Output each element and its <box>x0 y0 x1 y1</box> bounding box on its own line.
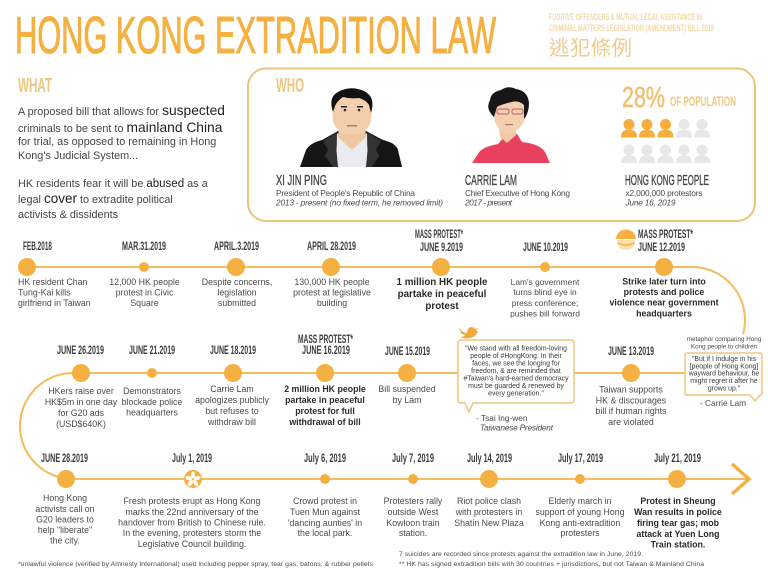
text: Hong Kong people details: x2,000,000 protestors <box>626 188 702 198</box>
event: Mar 31 2019: Square <box>130 298 159 308</box>
event: July 6 2019: Crowd protest in <box>293 496 357 506</box>
event: June 28 2019: JUNE 28.2019 <box>41 451 88 465</box>
event: Mar 31 2019 <box>109 239 180 308</box>
callout: Carrie Lam quote <box>680 334 765 408</box>
event: June 16 2019: protest for full <box>295 406 355 416</box>
event: June 15 2019: JUNE 15.2019 <box>385 344 430 358</box>
event: June 13 2019: HK & discourages <box>596 396 667 406</box>
event: July 1 2019: Fresh protests erupt as Hong Kong <box>124 496 261 506</box>
event: June 12 2019: Strike later turn into <box>622 276 706 286</box>
event: June 12 2019: MASS PROTEST* <box>638 227 693 241</box>
event: June 18 2019: Carrie Lam <box>210 384 254 394</box>
event: April 3 2019: APRIL.3.2019 <box>214 239 259 253</box>
text: Tsai Ing-wen attribution: - Tsai Ing-wen <box>476 413 528 423</box>
callout: Tsai Ing-wen quote: must be guarded & renewed by <box>468 383 564 390</box>
event: June 28 2019: help "liberate" <box>38 525 92 535</box>
callout: Carrie Lam quote: wayward behaviour, he <box>688 370 759 378</box>
text: Xi Jin Ping details: President of People's Republic of China <box>276 188 415 198</box>
event: July 6 2019: Tuen Mun against <box>290 507 361 517</box>
text block: what description <box>18 103 225 221</box>
event: April 28 2019: protest at legislative <box>293 288 371 298</box>
event: Feb 2018: FEB.2018 <box>23 239 52 253</box>
event: April 28 2019: 130,000 HK people <box>294 277 370 287</box>
event: July 7 2019: station. <box>399 528 427 538</box>
event: June 28 2019: activists call on <box>35 504 95 514</box>
callout: Tsai Ing-wen quote: freedom, & are reminded that <box>471 368 561 375</box>
callout: Tsai Ing-wen quote: "We stand with all freedom-loving <box>465 346 567 352</box>
event: June 13 2019 <box>596 344 667 427</box>
panel: who <box>248 68 755 221</box>
event: July 1 2019: July 1, 2019 <box>172 451 212 465</box>
timeline path <box>20 267 748 479</box>
text: Carrie Lam details: CARRIE LAM <box>465 173 517 189</box>
icon: helmet protester <box>616 230 636 250</box>
event: July 7 2019 <box>384 451 443 538</box>
text: Xi Jin Ping details: XI JIN PING <box>276 173 327 189</box>
panel: what <box>18 75 225 221</box>
event: Mar 31 2019: 12,000 HK people <box>109 277 180 287</box>
event: July 21 2019: firing tear gas; mob <box>637 518 720 528</box>
footnote: suicides and extradition bills: ** HK has signed extradition bills with 30 countries + jurisdictions, but not Taiwan & Mainland China <box>399 561 704 568</box>
subtitle: bill name <box>549 12 714 34</box>
event: July 7 2019: Protesters rally <box>384 496 443 506</box>
event: April 28 2019 <box>293 239 371 308</box>
text: Hong Kong people details: June 16, 2019 <box>624 198 676 208</box>
event: Feb 2018 <box>18 239 91 308</box>
event: July 1 2019: Legislative Council building. <box>138 539 246 549</box>
icon: bauhinia flower <box>185 472 201 487</box>
event: June 15 2019 <box>378 344 436 405</box>
event: July 7 2019: July 7, 2019 <box>392 451 434 465</box>
event: June 21 2019: blockade police <box>122 397 182 407</box>
event: April 28 2019: building <box>317 298 347 308</box>
event: July 14 2019: Riot police clash <box>457 496 521 506</box>
pictogram: people <box>621 119 710 163</box>
event: June 10 2019 <box>510 240 580 318</box>
event: June 28 2019: Hong Kong <box>43 493 87 503</box>
text: Tsai Ing-wen attribution <box>476 413 554 432</box>
event: June 10 2019: turns blind eye in <box>513 287 577 297</box>
event: June 21 2019: Demonstrators <box>123 386 181 396</box>
event: July 17 2019 <box>535 451 625 538</box>
footnote: suicides and extradition bills: 7 suicides are recorded since protests against the extradition law in June, 2019. <box>399 551 643 558</box>
event: July 6 2019: 'dancing aunties' in <box>288 518 362 528</box>
footnote: unlawful violence: *unlawful violence (verified by Amnesty International) used including pepper spray, tear gas, batons, & rubber pellets <box>18 561 374 568</box>
event: July 14 2019: Shatin New Plaza <box>454 518 524 528</box>
event: June 10 2019: JUNE 10.2019 <box>523 240 568 254</box>
event: July 21 2019: Wan results in police <box>634 507 722 517</box>
event: July 17 2019: Kong anti-extradition <box>540 518 620 528</box>
event: June 28 2019: the city. <box>50 536 80 546</box>
event: June 9 2019: MASS PROTEST* <box>415 227 463 241</box>
footnote: suicides and extradition bills <box>399 551 704 568</box>
text block: what description: criminals to be sent to mainland China <box>18 120 223 135</box>
event: June 9 2019: JUNE 9.2019 <box>420 240 463 254</box>
event: June 26 2019: HKers raise over <box>48 386 114 396</box>
event: June 12 2019: JUNE 12.2019 <box>638 240 685 254</box>
callout: Tsai Ing-wen quote: faces, we see the longing for <box>472 360 561 368</box>
event: July 6 2019 <box>288 451 362 538</box>
event: June 18 2019: JUNE 18.2019 <box>210 343 256 357</box>
event: June 12 2019: violence near government <box>609 298 719 308</box>
event: April 3 2019 <box>202 239 272 308</box>
portrait: Carrie Lam <box>472 87 550 163</box>
heading: what: WHAT <box>18 75 52 97</box>
event: June 21 2019 <box>122 343 182 418</box>
event: July 17 2019: protesters <box>560 528 600 538</box>
event: June 12 2019: protests and police <box>624 287 704 297</box>
callout: Carrie Lam quote: "But if I indulge in his <box>692 356 757 363</box>
text block: what description: Kong's Judicial System... <box>18 150 138 162</box>
event: June 12 2019 <box>609 227 719 318</box>
event: June 16 2019: partake in peaceful <box>285 395 365 405</box>
event: June 26 2019: (USD$640K) <box>56 419 106 429</box>
callout: Carrie Lam quote: grows up." <box>708 386 741 392</box>
text: Carrie Lam details: Chief Executive of Hong Kong <box>465 188 570 198</box>
event: June 28 2019 <box>35 451 95 546</box>
arrow head <box>732 464 749 494</box>
event: Mar 31 2019: MAR.31.2019 <box>122 239 166 253</box>
text: Carrie Lam details: 2017 - present <box>464 198 513 208</box>
event: June 9 2019: partake in peaceful <box>398 289 487 300</box>
event: July 14 2019: with protesters in <box>455 507 522 517</box>
event: June 9 2019 <box>397 227 488 312</box>
text: Carrie Lam details <box>464 173 570 208</box>
event: July 21 2019 <box>634 451 722 550</box>
event: April 3 2019: Despite concerns, <box>202 277 272 287</box>
event: June 16 2019: MASS PROTEST* <box>298 332 353 346</box>
event: June 15 2019: by Lam <box>393 395 421 405</box>
event: July 6 2019: July 6, 2019 <box>304 451 346 465</box>
callout: Carrie Lam quote: - Carrie Lam <box>700 398 746 408</box>
event: June 10 2019: pushes bill forward <box>510 308 580 318</box>
event: July 1 2019 <box>118 451 266 549</box>
event: June 13 2019: are violated <box>608 417 654 427</box>
callout: Tsai Ing-wen quote: people of #HongKong. In their <box>470 353 562 360</box>
event: June 18 2019 <box>195 343 270 427</box>
event: June 16 2019: withdrawal of bill <box>288 417 361 427</box>
event: June 18 2019: but refuses to <box>205 406 259 416</box>
event: June 21 2019: JUNE 21.2019 <box>129 343 175 357</box>
callout: Carrie Lam quote: [people of Hong Kong] <box>690 364 758 370</box>
text: Xi Jin Ping details <box>275 173 443 208</box>
text block: what description: A proposed bill that allows for suspected <box>18 103 225 118</box>
text: Tsai Ing-wen attribution: Taiwanese President <box>480 422 554 432</box>
text: Xi Jin Ping details: 2013 - present (no fixed term, he removed limit) <box>275 198 443 208</box>
callout: Carrie Lam quote: Kong people to children <box>691 344 758 350</box>
event: July 7 2019: outside West <box>388 507 439 517</box>
text block: what description: activists & dissidents <box>18 209 119 221</box>
callout: Tsai Ing-wen quote <box>458 340 574 412</box>
event: July 6 2019: the local park. <box>298 528 352 538</box>
event: July 17 2019: July 17, 2019 <box>558 451 603 465</box>
portrait: Xi Jin Ping <box>300 88 402 167</box>
chinese title: 逃犯條例 <box>549 37 632 60</box>
event: July 21 2019: Train station. <box>651 540 705 550</box>
event: Feb 2018: HK resident Chan <box>18 277 88 287</box>
event: Feb 2018: girlfriend in Taiwan <box>18 298 91 308</box>
event: Feb 2018: Tung-Kai kills <box>18 288 71 298</box>
event: June 26 2019 <box>45 343 118 429</box>
event: June 16 2019: JUNE 16.2019 <box>302 343 350 357</box>
callout: Carrie Lam quote: might regret it after he <box>690 378 758 385</box>
event: June 21 2019: headquarters <box>126 408 179 418</box>
event: June 15 2019: Bill suspended <box>378 384 436 394</box>
event: June 10 2019: press conference; <box>512 298 578 308</box>
text block: what description: legal cover to extradite political <box>18 191 173 206</box>
event: June 9 2019: protest <box>425 301 459 312</box>
event: July 14 2019: July 14, 2019 <box>467 451 512 465</box>
event: April 28 2019: APRIL 28.2019 <box>307 239 356 253</box>
event: June 16 2019 <box>284 332 366 427</box>
event: June 26 2019: for G20 ads <box>58 408 105 418</box>
event: June 26 2019: HK$5m in one day <box>45 397 118 407</box>
event: April 3 2019: submitted <box>218 298 256 308</box>
stat: 28% of population: 28% <box>622 82 665 114</box>
text: Hong Kong people details <box>624 173 709 208</box>
event: July 21 2019: attack at Yuen Long <box>637 529 719 539</box>
callout: Tsai Ing-wen quote: every generation." <box>488 390 544 398</box>
callout: Tsai Ing-wen quote: #Taiwan's hard-earned democracy <box>463 376 569 382</box>
event: July 17 2019: Elderly march in <box>548 496 612 506</box>
event: June 18 2019: apologizes publicly <box>195 395 270 405</box>
event: Mar 31 2019: protest in Civic <box>116 288 174 298</box>
icon: twitter bird <box>459 327 478 338</box>
event: June 10 2019: Lam's government <box>511 277 580 287</box>
stat: 28% of population <box>622 82 736 114</box>
event: June 28 2019: G20 leaders to <box>36 514 94 524</box>
event: July 21 2019: Protest in Sheung <box>640 496 716 506</box>
event: June 18 2019: withdraw bill <box>207 417 256 427</box>
event: June 16 2019: 2 million HK people <box>284 384 366 394</box>
event: July 1 2019: In the evening, protesters storm the <box>123 528 261 538</box>
callout: Carrie Lam quote: metaphor comparing Hong <box>687 336 762 343</box>
event: July 21 2019: July 21, 2019 <box>654 451 701 465</box>
event: June 12 2019: headquarters <box>636 308 692 318</box>
text block: what description: HK residents fear it will be abused as a <box>18 178 209 190</box>
heading: who: WHO <box>276 75 304 97</box>
event: June 13 2019: Taiwan supports <box>599 384 663 394</box>
event: June 13 2019: JUNE 13.2019 <box>608 344 654 358</box>
event: June 13 2019: bill if human rights <box>596 406 667 416</box>
event: July 17 2019: support of young Hong <box>535 507 625 517</box>
event: April 3 2019: legislation <box>217 288 257 298</box>
event: July 14 2019 <box>454 451 524 528</box>
event: June 9 2019: 1 million HK people <box>397 277 488 288</box>
text block: what description: for trial, as opposed to remaining in Hong <box>18 136 216 148</box>
event: July 1 2019: handover from British to Chinese rule. <box>118 518 266 528</box>
event: June 26 2019: JUNE 26.2019 <box>57 343 104 357</box>
event: July 1 2019: marks the 22nd anniversary of the <box>125 507 259 517</box>
event: July 7 2019: Kowloon train <box>386 518 440 528</box>
